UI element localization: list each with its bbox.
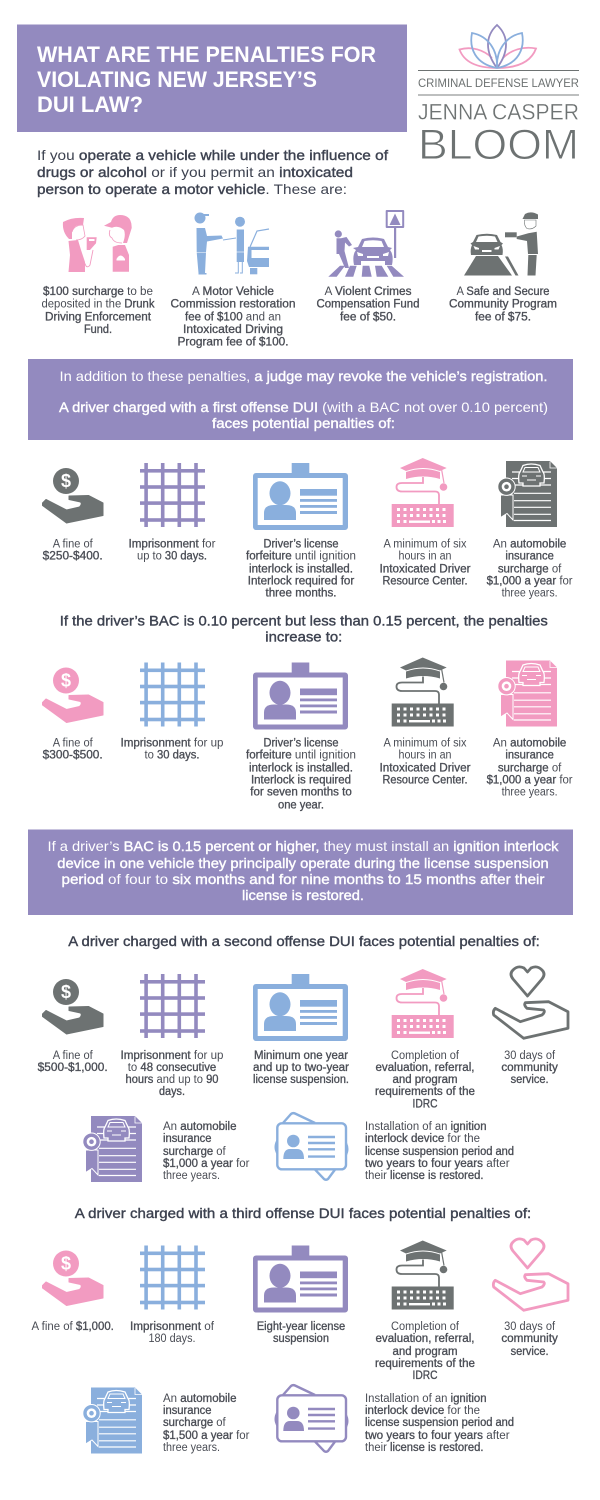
caption: IDRC requirements: and program [392,1074,458,1086]
text block: intro: If you operate a vehicle while under the influence of [37,147,388,163]
caption: imprisonment: Imprisonment for up [120,1050,224,1062]
caption: safe and secure program: fee of $75. [475,312,531,324]
caption: insurance surcharge: three years. [163,1170,220,1182]
caption: ignition interlock: license suspension period and [365,1417,514,1429]
panel: high BAC banner [28,830,573,915]
caption: imprisonment [120,1050,224,1098]
caption: imprisonment: up to 30 days. [137,551,207,563]
panel: elevated BAC penalties [42,658,573,812]
caption: imprisonment [128,539,216,563]
heading: third offense: A driver charged with a third offense DUI faces potential penalties of: [75,1205,531,1221]
panel: first offense penalties [42,458,573,600]
caption: resource center: Resource Center. [382,775,468,787]
caption: fine [43,539,103,563]
caption: drunk driving surcharge: deposited in the Drunk [42,299,155,311]
caption: license forfeiture [246,738,356,812]
caption: drunk driving surcharge: Fund. [84,324,112,336]
heading: BAC 0.10 to 0.15: increase to: [265,629,342,645]
text block: intro: person to operate a motor vehicle . These are: [37,181,347,197]
caption: insurance surcharge: three years. [163,1442,220,1454]
icon: ignition interlock card [275,1113,348,1180]
text block: intro: drugs or alcohol or if you permit an intoxicated [37,164,353,180]
caption: resource center: Intoxicated Driver [380,763,471,775]
caption: license suspension [253,1050,349,1086]
caption: insurance surcharge: $1,000 a year for [487,775,573,787]
caption: fine: $500-$1,000. [38,1062,108,1074]
heading: second offense: A driver charged with a second offense DUI faces potential penalties of: [68,933,540,949]
title [37,42,376,117]
icon: insurance document [498,461,557,527]
icon: heart in hand [493,1239,568,1310]
icon: fine [42,468,103,523]
caption: ignition interlock [365,1393,514,1454]
caption: motor vehicle commission: Commission restoration [170,299,296,311]
panel: high BAC banner: device in one vehicle they principally operate during the license suspension [57,855,549,871]
caption: insurance surcharge: surcharge of [163,1417,226,1429]
icon: license [253,1246,348,1312]
caption: license forfeiture: Driver’s license [264,738,338,750]
caption: resource center: A minimum of six [384,738,467,750]
caption: IDRC requirements: Completion of [391,1321,460,1333]
icon: heart in hand [493,967,568,1038]
caption: fine: $300-$500. [43,750,103,762]
caption: imprisonment: to 48 consecutive [128,1062,216,1074]
caption: insurance surcharge: three years. [502,588,558,600]
icon: jail bars [140,662,205,726]
caption: fine [43,738,103,762]
caption: license forfeiture: Driver’s license [264,539,338,551]
icon: license [253,463,348,530]
icon: insurance document [83,1116,142,1182]
caption: IDRC requirements: requirements of the [375,1358,475,1370]
caption: insurance surcharge [163,1121,250,1182]
caption: license suspension: Minimum one year [254,1050,348,1062]
caption: insurance surcharge: insurance [163,1133,212,1145]
caption: ignition interlock [365,1121,514,1182]
caption: license forfeiture: Interlock is required [251,775,351,787]
caption: IDRC requirements: IDRC [412,1099,438,1111]
title: DUI LAW? [37,92,143,117]
caption: imprisonment [130,1321,215,1345]
caption: fine: A fine of [53,738,93,750]
caption: insurance surcharge: surcharge of [163,1146,226,1158]
caption: community service [501,1050,558,1086]
icon: fine [42,668,103,722]
logo: Jenna Casper Bloom: CRIMINAL DEFENSE LAWYER [418,78,579,90]
icon: fine [42,979,103,1034]
caption: community service: 30 days of [504,1321,556,1333]
logo: Jenna Casper Bloom: JENNA CASPER [418,100,579,124]
caption: imprisonment: Imprisonment for [128,539,216,551]
icon: police checkpoint [464,212,538,276]
caption: motor vehicle commission: Intoxicated Driving [183,324,283,336]
caption: imprisonment: hours and up to 90 [126,1074,218,1086]
caption: IDRC requirements: Completion of [391,1050,460,1062]
caption: insurance surcharge: surcharge of [498,563,562,575]
caption: IDRC requirements [375,1050,475,1111]
caption: insurance surcharge: insurance [163,1405,212,1417]
caption: insurance surcharge: $1,000 a year for [487,575,573,587]
caption: safe and secure program: Community Program [449,299,557,311]
panel: first offense banner: A driver charged with a first offense DUI (with a BAC not over 0.10 percent) [59,399,548,415]
caption: insurance surcharge: An automobile [163,1121,236,1133]
icon: online course [392,658,454,726]
caption: fine [38,1050,108,1074]
caption: license forfeiture: three months. [266,588,336,600]
caption: insurance surcharge [487,738,573,799]
icon: online course [392,969,454,1038]
caption: motor vehicle commission: A Motor Vehicle [192,286,274,298]
panel: title banner [17,24,407,132]
caption: community service: service. [511,1346,549,1358]
caption: community service [501,1321,558,1358]
caption: ignition interlock: two years to four years after [365,1430,510,1442]
caption: community service: community [501,1333,558,1345]
caption: insurance surcharge: $1,500 a year for [163,1430,250,1442]
caption: insurance surcharge: insurance [505,551,554,563]
caption: safe and secure program [449,286,557,324]
caption: imprisonment: to 30 days. [144,750,200,762]
caption: IDRC requirements: and program [392,1346,458,1358]
panel: first offense banner: faces potential penalties of: [212,415,395,431]
caption: fine: A fine of [53,1050,93,1062]
caption: insurance surcharge [163,1393,250,1454]
captions: third offense row [32,1321,558,1382]
caption: resource center: Resource Center. [382,575,468,587]
caption: ignition interlock: Installation of an ignition [365,1121,486,1133]
icon: breathalyzer test [63,215,132,272]
caption: license forfeiture: for seven months to [250,787,352,799]
caption: insurance surcharge: surcharge of [498,763,562,775]
caption: fine: A fine of $1,000. [32,1321,114,1333]
caption: insurance surcharge [487,539,573,600]
icon: insurance document [498,660,557,726]
caption: insurance surcharge: $1,000 a year for [163,1158,250,1170]
caption: imprisonment [120,738,224,762]
icon: handshake and car [194,212,269,274]
caption: IDRC requirements: evaluation, referral, [376,1333,474,1345]
icon: license [253,974,348,1041]
caption: IDRC requirements [375,1321,475,1382]
heading: BAC 0.10 to 0.15: If the driver’s BAC is 0.10 percent but less than 0.15 percent, the penalties [60,613,548,629]
logo: Jenna Casper Bloom [418,25,579,169]
caption: license suspension: suspension [273,1333,329,1345]
captions: fees [42,286,557,349]
heading: BAC 0.10 to 0.15 [60,613,548,645]
caption: license forfeiture: forfeiture until ignition [246,750,356,762]
caption: resource center: A minimum of six [384,539,467,551]
caption: license suspension [257,1321,345,1345]
panel: second offense penalties [38,967,568,1182]
panel: first offense banner [28,359,573,440]
caption: ignition interlock: two years to four years after [365,1158,510,1170]
caption: safe and secure program: A Safe and Secure [456,286,550,298]
caption: community service: 30 days of [504,1050,556,1062]
panel: fee icons [63,210,538,277]
icon: ignition interlock card [275,1385,348,1452]
caption: license forfeiture: forfeiture until ignition [246,551,356,563]
caption: IDRC requirements: IDRC [412,1370,438,1382]
caption: ignition interlock: their license is restored. [365,1170,484,1182]
icon: insurance document [83,1388,142,1454]
caption: motor vehicle commission: Program fee of $100. [178,337,288,349]
caption: ignition interlock: their license is restored. [365,1442,484,1454]
caption: resource center: Intoxicated Driver [380,563,471,575]
panel: third offense penalties [32,1239,568,1454]
caption: resource center [380,539,471,587]
caption: ignition interlock: interlock device for the [365,1133,480,1145]
icon: online course [392,1240,454,1310]
caption: imprisonment: days. [159,1086,185,1098]
caption: drunk driving surcharge: $100 surcharge to be [43,286,153,298]
panel: high BAC banner: period of four to six months and for nine months to 15 months after their [62,871,545,887]
caption: community service: service. [511,1074,549,1086]
icon: jail bars [140,974,205,1038]
caption: license suspension: license suspension. [253,1074,349,1086]
icon: lotus [460,25,536,68]
caption: insurance surcharge: An automobile [493,539,566,551]
caption: license forfeiture: interlock is installed. [249,763,353,775]
caption: resource center: hours in an [398,750,452,762]
caption: license suspension: and up to two-year [253,1062,349,1074]
caption: resource center: hours in an [398,551,452,563]
title: VIOLATING NEW JERSEY’S [37,67,317,92]
icon: license [253,662,348,730]
caption: insurance surcharge: An automobile [163,1393,236,1405]
caption: ignition interlock: Installation of an ignition [365,1393,486,1405]
caption: fine: A fine of [53,539,93,551]
title: WHAT ARE THE PENALTIES FOR [37,42,376,67]
caption: imprisonment: Imprisonment of [130,1321,215,1333]
caption: drunk driving surcharge: Driving Enforcement [45,312,152,324]
caption: IDRC requirements: requirements of the [375,1086,475,1098]
caption: imprisonment: Imprisonment for up [120,738,224,750]
caption: license forfeiture [246,539,356,600]
panel: high BAC banner: license is restored. [242,887,364,903]
caption: drunk driving surcharge [42,286,155,336]
caption: license forfeiture: one year. [278,800,324,812]
caption: insurance surcharge: three years. [502,787,558,799]
caption: community service: community [501,1062,558,1074]
caption: violent crimes fund [316,286,420,324]
caption: motor vehicle commission: fee of $100 and an [185,312,281,324]
caption: violent crimes fund: Compensation Fund [316,299,420,311]
caption: ignition interlock: license suspension period and [365,1146,514,1158]
logo: Jenna Casper Bloom: BLOOM [418,121,579,169]
caption: fine: $250-$400. [43,551,103,563]
caption: imprisonment: 180 days. [148,1333,196,1345]
caption: ignition interlock: interlock device for the [365,1405,480,1417]
caption: license forfeiture: interlock is installed. [249,563,353,575]
caption: violent crimes fund: fee of $50. [340,312,396,324]
caption: license forfeiture: Interlock required for [248,575,354,587]
panel: high BAC banner: If a driver’s BAC is 0.15 percent or higher, they must install an ignition interlock [48,838,560,854]
caption: license suspension: Eight-year license [257,1321,345,1333]
caption: motor vehicle commission [170,286,296,349]
caption: insurance surcharge: An automobile [493,738,566,750]
text block: intro [37,147,388,197]
caption: violent crimes fund: A Violent Crimes [324,286,412,298]
icon: fine [42,1250,103,1306]
panel: first offense banner: In addition to these penalties, a judge may revoke the vehicle’s registration. [60,368,548,384]
icon: pedestrian crossing [328,210,404,277]
icon: online course [392,458,454,527]
caption: resource center [380,738,471,787]
icon: jail bars [140,1246,205,1310]
icon: jail bars [140,463,205,527]
caption: insurance surcharge: insurance [505,750,554,762]
caption: IDRC requirements: evaluation, referral, [376,1062,474,1074]
captions: second offense row [38,1050,558,1111]
